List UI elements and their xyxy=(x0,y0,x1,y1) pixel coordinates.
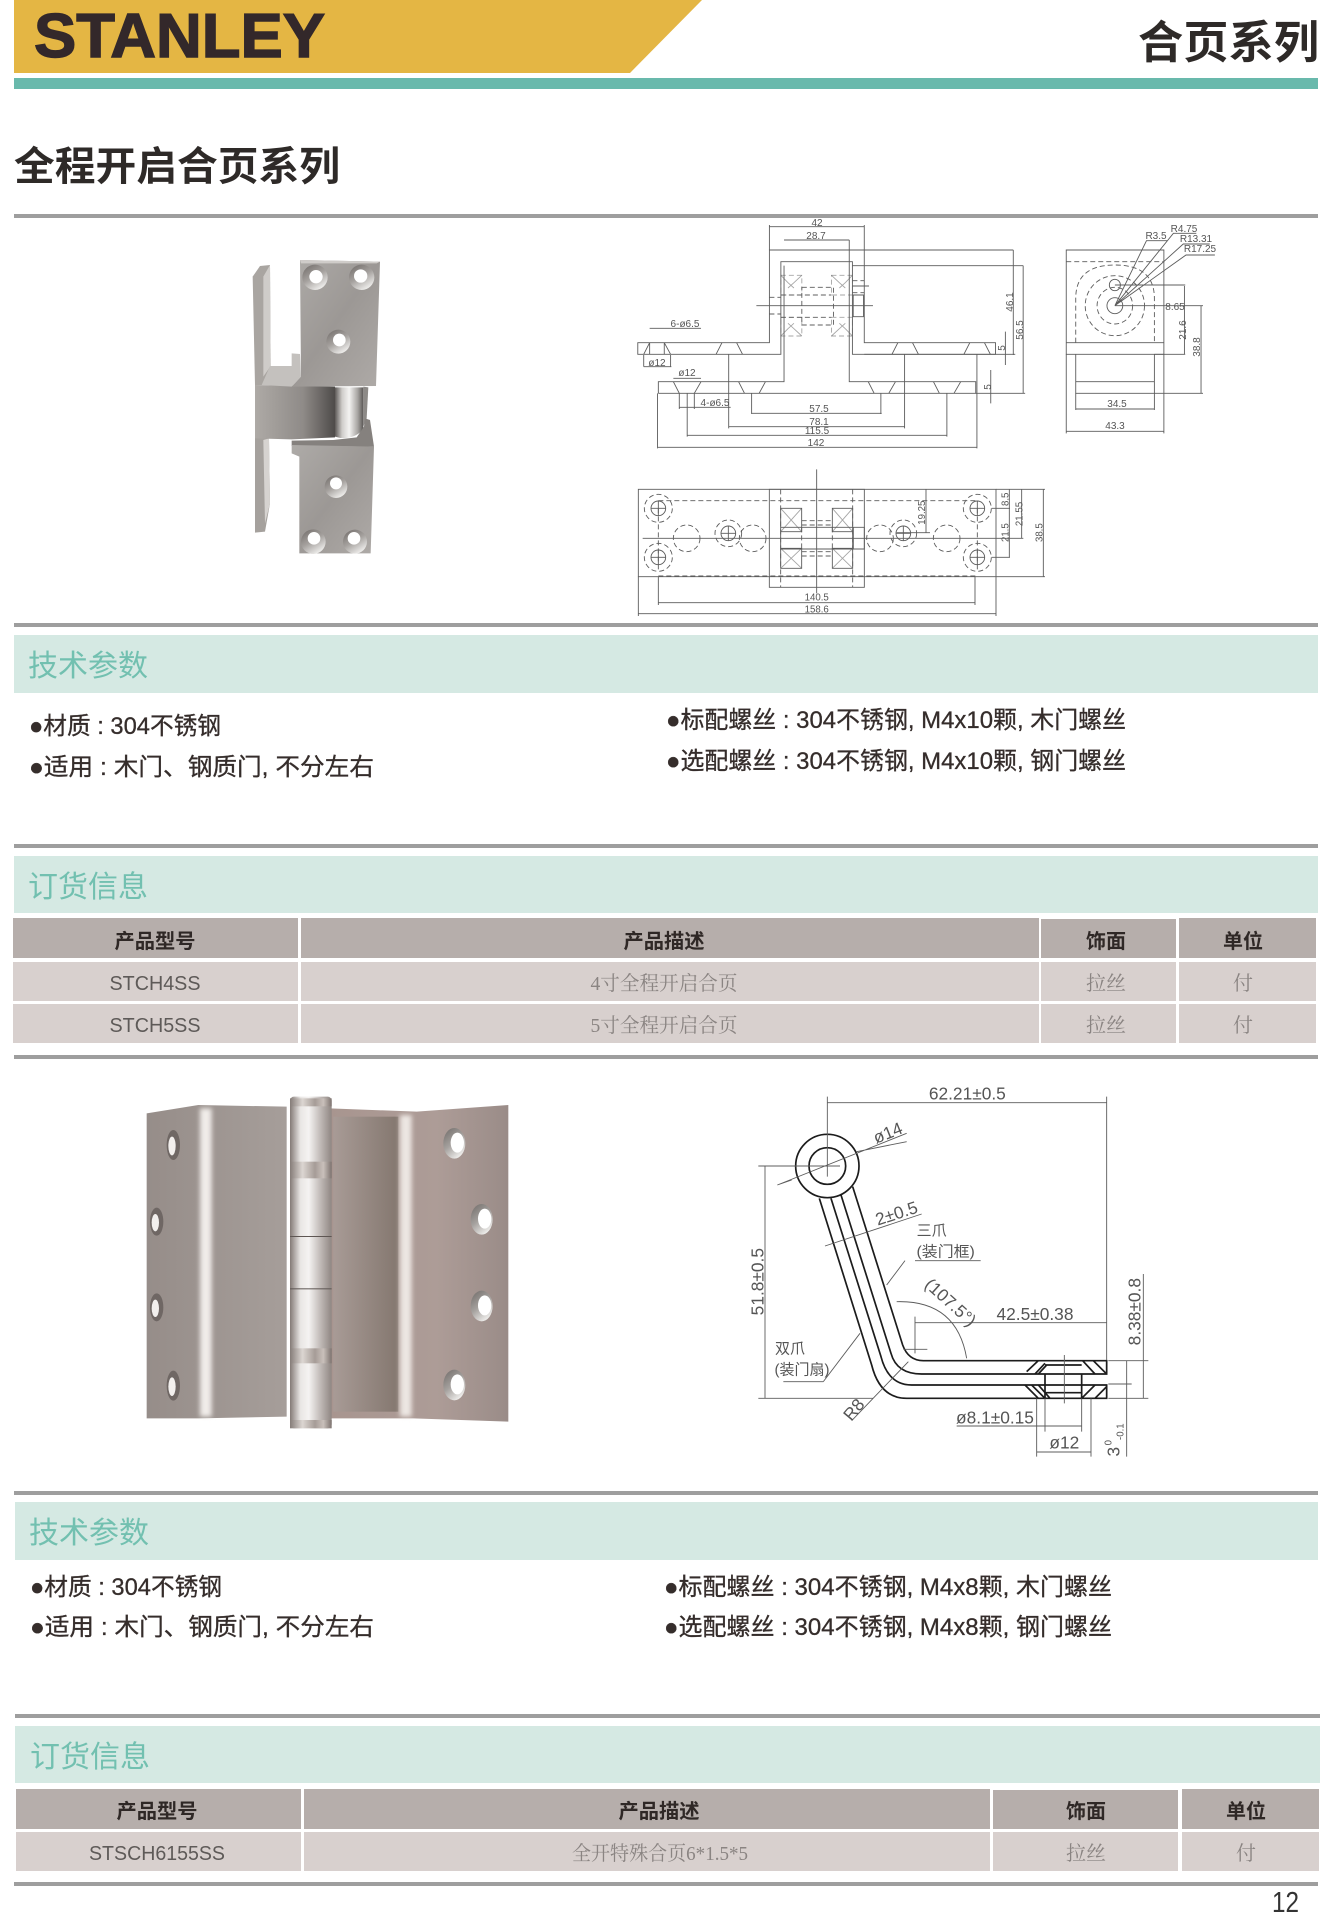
technical drawing: hinge section xyxy=(747,1083,1148,1457)
dimension labels: front view: 78.1 xyxy=(809,417,829,428)
section band xyxy=(15,1726,1320,1783)
ordering table: 4寸全程开启合页 xyxy=(590,972,738,995)
ordering table: 全开特殊合页6*1.5*5 xyxy=(572,1842,748,1865)
technical drawing: hinge section: 42.5±0.38 xyxy=(997,1304,1073,1324)
dimension labels: front view: 43.3 xyxy=(1105,421,1125,432)
ordering table xyxy=(16,1789,1319,1871)
dimension labels: front view: 46.1 xyxy=(1005,292,1016,312)
technical drawing: hinge section: R8 xyxy=(839,1395,869,1424)
ordering table: 拉丝 xyxy=(1066,1842,1106,1865)
technical drawing: hinge section: (107.5°) xyxy=(921,1274,980,1330)
parameter list right xyxy=(666,707,1126,775)
section heading: 订货信息 xyxy=(28,871,148,904)
technical drawing: hinge section: 2±0.5 xyxy=(873,1197,920,1229)
ordering table: 5寸全程开启合页 xyxy=(590,1014,738,1037)
parameter list left: ●适用 : 木门、钢质门, 不分左右 xyxy=(29,754,374,781)
dimension labels: front view: 6-ø6.5 xyxy=(671,319,700,330)
header banner xyxy=(14,0,1319,89)
technical drawing: top view: 158.6 xyxy=(805,605,829,616)
dimension labels: front view: 57.5 xyxy=(809,404,829,415)
technical drawing: hinge section: 62.21±0.5 xyxy=(929,1083,1006,1103)
technical drawing: hinge section: (装门框) xyxy=(916,1244,975,1261)
dimension labels: front view xyxy=(648,218,1217,449)
technical drawing: top view: 140.5 xyxy=(805,593,829,604)
ordering table: 单位 xyxy=(1223,929,1263,953)
technical drawing: top view: 19.25 xyxy=(917,501,928,525)
front view outlines xyxy=(638,225,1215,448)
dimension labels: front view: ø12 xyxy=(648,358,666,369)
ordering table: 产品描述 xyxy=(624,930,704,953)
parameter list right xyxy=(664,1574,1112,1641)
dimension labels: front view: 42 xyxy=(811,218,823,229)
technical drawing: hinge section: 双爪 xyxy=(775,1340,805,1357)
dimension labels: front view: 28.7 xyxy=(806,231,826,242)
dimension labels: front view: 142 xyxy=(808,438,825,449)
technical drawing: hinge section: 3 xyxy=(1103,1447,1123,1456)
ordering table: 拉丝 xyxy=(1086,972,1126,995)
teal header bar xyxy=(14,78,1318,89)
parameter list left xyxy=(29,713,374,781)
technical drawing: hinge section: ø8.1±0.15 xyxy=(956,1407,1034,1427)
parameter list left: ●材质 : 304不锈钢 xyxy=(29,713,221,740)
ordering table: STCH5SS xyxy=(110,1015,200,1037)
product photo: pivot hinge xyxy=(253,260,380,554)
dimension labels: front view: ø12 xyxy=(678,368,696,379)
section heading: 技术参数 xyxy=(29,1517,149,1550)
ordering table: 单位 xyxy=(1226,1799,1266,1823)
panel: ordering info 1 xyxy=(13,856,1318,1043)
parameter list right: ●标配螺丝 : 304不锈钢, M4x8颗, 木门螺丝 xyxy=(664,1574,1112,1601)
series heading: 合页系列 xyxy=(1138,17,1319,68)
technical drawing: hinge section: ø12 xyxy=(1049,1432,1079,1452)
dimension labels: front view: R17.25 xyxy=(1184,244,1217,255)
dimension labels: front view: 115.5 xyxy=(805,426,830,437)
technical drawing: hinge section: 0 xyxy=(1104,1440,1115,1445)
dimension labels: front view: 5 xyxy=(997,345,1008,351)
section heading: 订货信息 xyxy=(30,1741,150,1774)
dimension lines xyxy=(758,1097,1148,1457)
technical drawing: hinge section: 8.38±0.8 xyxy=(1125,1278,1145,1345)
ordering table xyxy=(13,918,1316,1043)
gold logo banner xyxy=(14,0,702,73)
ordering table: 产品型号 xyxy=(116,1800,198,1823)
ordering table: STCH4SS xyxy=(110,973,200,995)
dimension labels: front view: 21.6 xyxy=(1178,320,1189,340)
dimension labels: front view: 4-ø6.5 xyxy=(701,398,730,409)
panel: technical parameters 1 xyxy=(14,635,1318,781)
product photo: swing hinge xyxy=(147,1097,508,1428)
dimension labels: front view: 34.5 xyxy=(1107,399,1127,410)
ordering table: 产品描述 xyxy=(618,1800,700,1823)
section band xyxy=(14,635,1318,693)
ordering table: 饰面 xyxy=(1086,930,1126,953)
parameter list right: ●选配螺丝 : 304不锈钢, M4x8颗, 钢门螺丝 xyxy=(664,1614,1112,1641)
ordering table: 拉丝 xyxy=(1086,1014,1126,1037)
ordering table: 付 xyxy=(1233,972,1253,995)
dimension labels: front view: 5 xyxy=(983,384,994,390)
section band xyxy=(14,856,1318,913)
parameter list left: ●适用 : 木门、钢质门, 不分左右 xyxy=(30,1614,374,1641)
parameter list right: ●选配螺丝 : 304不锈钢, M4x10颗, 钢门螺丝 xyxy=(666,748,1126,775)
dimension labels: front view: R3.5 xyxy=(1145,231,1167,242)
technical drawing: hinge section: 51.8±0.5 xyxy=(747,1248,767,1315)
dimension labels: front view: 8.65 xyxy=(1165,302,1185,313)
technical drawing: hinge section: -0.1 xyxy=(1115,1423,1126,1440)
brand logo STANLEY: STANLEY xyxy=(34,2,325,71)
dimension labels: front view: R4.75 xyxy=(1171,224,1198,235)
parameter list left: ●材质 : 304不锈钢 xyxy=(30,1574,222,1601)
parameter list right: ●标配螺丝 : 304不锈钢, M4x10颗, 木门螺丝 xyxy=(666,707,1126,734)
section heading: 技术参数 xyxy=(28,650,148,683)
page number: 12 xyxy=(1272,1887,1299,1919)
ordering table: STSCH6155SS xyxy=(89,1843,225,1865)
dimension labels: front view: R13.31 xyxy=(1180,234,1213,245)
hinge profile xyxy=(796,1134,1107,1398)
panel: ordering info 2 xyxy=(15,1726,1320,1871)
technical drawing: top view xyxy=(638,469,1046,616)
page title: 全程开启合页系列 xyxy=(14,145,340,189)
panel: technical parameters 2 xyxy=(15,1502,1318,1641)
technical drawing: top view: 21.5 xyxy=(1001,523,1012,542)
dimension labels: front view: 56.5 xyxy=(1015,320,1026,340)
ordering table: 产品型号 xyxy=(114,930,196,953)
technical drawing: hinge section: (装门扇) xyxy=(774,1362,830,1379)
parameter list left xyxy=(30,1574,374,1641)
ordering table: 付 xyxy=(1236,1842,1256,1865)
section band xyxy=(15,1502,1318,1560)
technical drawing: top view: 8.5 xyxy=(1001,493,1012,506)
dimension labels: front view: 38.8 xyxy=(1192,337,1203,357)
technical drawing: hinge section: ø14 xyxy=(870,1118,906,1148)
ordering table: 付 xyxy=(1233,1014,1253,1037)
technical drawing: top view: 21.55 xyxy=(1015,502,1026,526)
technical drawing: top view: 38.5 xyxy=(1035,523,1046,542)
technical drawing: hinge section: 三爪 xyxy=(917,1223,947,1240)
technical drawing: front view xyxy=(638,218,1217,449)
ordering table: 饰面 xyxy=(1066,1800,1106,1823)
